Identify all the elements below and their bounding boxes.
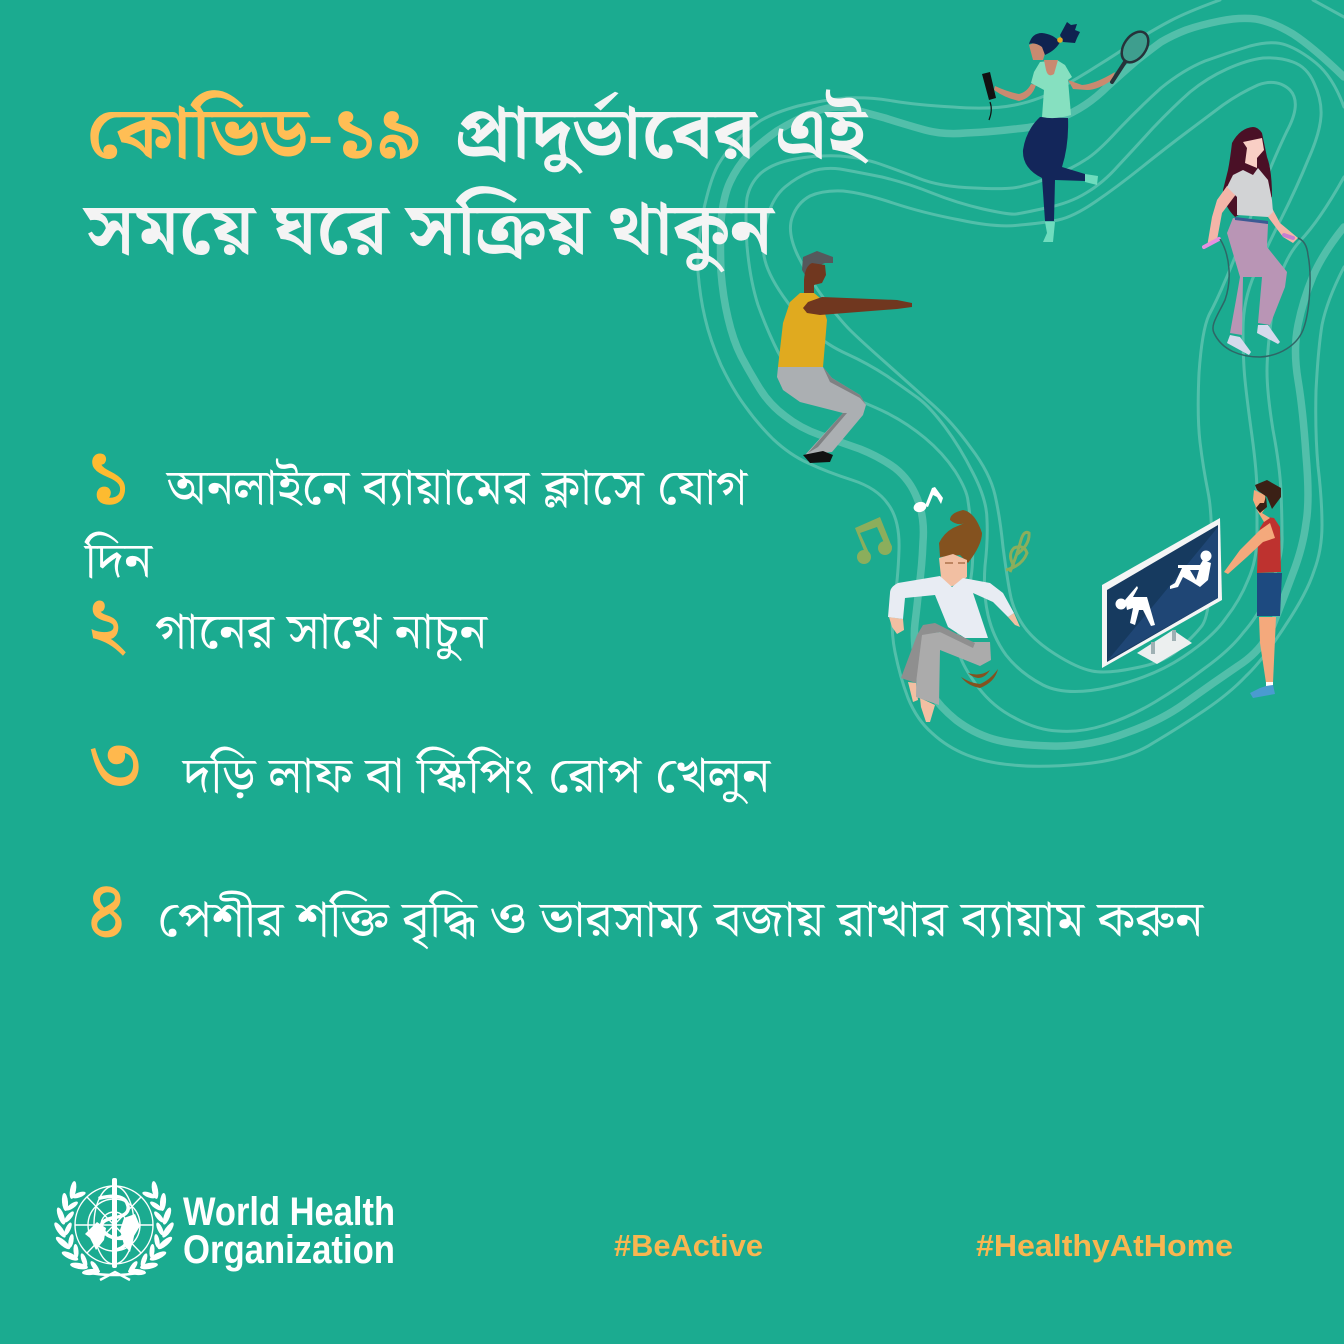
- logo: World Health Organization wordmark: Organization: [183, 1228, 395, 1272]
- title: line 1: [87, 89, 870, 175]
- icon: stretching figure: [1116, 586, 1155, 626]
- list item 2: [87, 579, 489, 670]
- figure: man in front of monitor: [1224, 480, 1282, 698]
- item 1 text: অনলাইনে ব্যায়ামের ক্লাসে যোগ: [165, 458, 749, 515]
- title: line 2: সময়ে ঘরে সক্রিয় থাকুন: [82, 185, 776, 274]
- hashtag: HealthyAtHome: #HealthyAtHome: [976, 1228, 1233, 1263]
- item 1 text continuation: দিন: [83, 531, 154, 588]
- icon: treble clef: [1006, 532, 1029, 572]
- number 4: ৪: [86, 864, 127, 955]
- list item 4: [86, 864, 1205, 955]
- number 1: ১: [86, 432, 130, 523]
- logo: World Health Organization wordmark: [183, 1190, 395, 1272]
- icon: sit-up figure: [1170, 550, 1212, 589]
- number 3: ৩: [88, 719, 144, 807]
- list item 3: [88, 719, 772, 807]
- figure: dancing woman: [888, 510, 1020, 722]
- logo: World Health Organization wordmark: World Health: [183, 1190, 395, 1234]
- figure: woman skipping rope: [1204, 127, 1310, 357]
- figure: woman with racket and controller: [982, 22, 1154, 242]
- hashtag: BeActive: #BeActive: [614, 1228, 763, 1263]
- icon: white music note: [912, 487, 943, 514]
- figure: monitor with exercise icons: [1102, 518, 1222, 668]
- title: white part: প্রাদুর্ভাবের এই: [455, 89, 870, 175]
- number 2: ২: [87, 579, 126, 670]
- item 2 text: গানের সাথে নাচুন: [155, 603, 489, 662]
- logo: WHO emblem: [52, 1178, 176, 1280]
- figure: man squatting: [777, 251, 912, 463]
- title: orange part: কোভিড-১৯: [87, 89, 423, 173]
- list item 1: [83, 432, 749, 588]
- item 4 text: পেশীর শক্তি বৃদ্ধি ও ভারসাম্য বজায় রাখার ব্যায়াম করুন: [157, 890, 1205, 950]
- icon: green music notes: [855, 517, 892, 564]
- item 3 text: দড়ি লাফ বা স্কিপিং রোপ খেলুন: [181, 746, 772, 805]
